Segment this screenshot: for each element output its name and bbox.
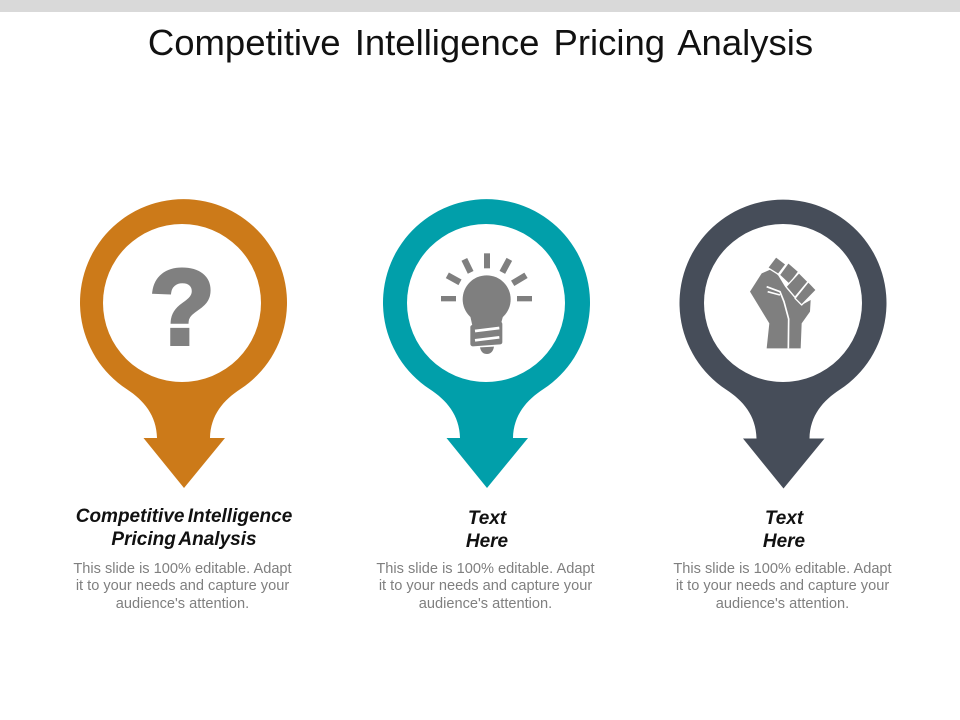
text block: column 2 bbox=[376, 508, 595, 612]
body 3 bbox=[673, 560, 892, 612]
title: Competitive Intelligence Pricing Analysis bbox=[148, 22, 813, 63]
pin: orange bbox=[80, 199, 287, 488]
body 3: This slide is 100% editable. Adapt bbox=[673, 560, 892, 576]
heading 2: Here bbox=[466, 531, 508, 552]
body 3: audience's attention. bbox=[716, 596, 849, 612]
heading 2 bbox=[466, 508, 508, 552]
body 1: it to your needs and capture your bbox=[76, 578, 289, 594]
body 1: This slide is 100% editable. Adapt bbox=[73, 560, 292, 576]
heading 3 bbox=[763, 508, 805, 552]
heading 1: Competitive Intelligence bbox=[76, 506, 292, 527]
icon: raised fist bbox=[750, 257, 816, 348]
text block: column 3 bbox=[673, 508, 892, 612]
body 2 bbox=[376, 560, 595, 612]
heading 2: Text bbox=[468, 508, 506, 529]
body 2: it to your needs and capture your bbox=[379, 578, 592, 594]
body 3: it to your needs and capture your bbox=[676, 578, 889, 594]
icon: question mark: ? bbox=[149, 247, 215, 367]
heading 3: Text bbox=[765, 508, 803, 529]
text block: column 1 bbox=[73, 506, 292, 612]
body 2: This slide is 100% editable. Adapt bbox=[376, 560, 595, 576]
pin: teal bbox=[383, 199, 590, 488]
body 1 bbox=[73, 560, 292, 612]
heading 3: Here bbox=[763, 531, 805, 552]
top bar bbox=[0, 0, 960, 12]
heading 1 bbox=[76, 506, 292, 550]
icon: light bulb bbox=[441, 253, 532, 354]
body 2: audience's attention. bbox=[419, 596, 552, 612]
body 1: audience's attention. bbox=[116, 596, 249, 612]
heading 1: Pricing Analysis bbox=[111, 529, 257, 550]
pin: slate bbox=[680, 200, 886, 488]
